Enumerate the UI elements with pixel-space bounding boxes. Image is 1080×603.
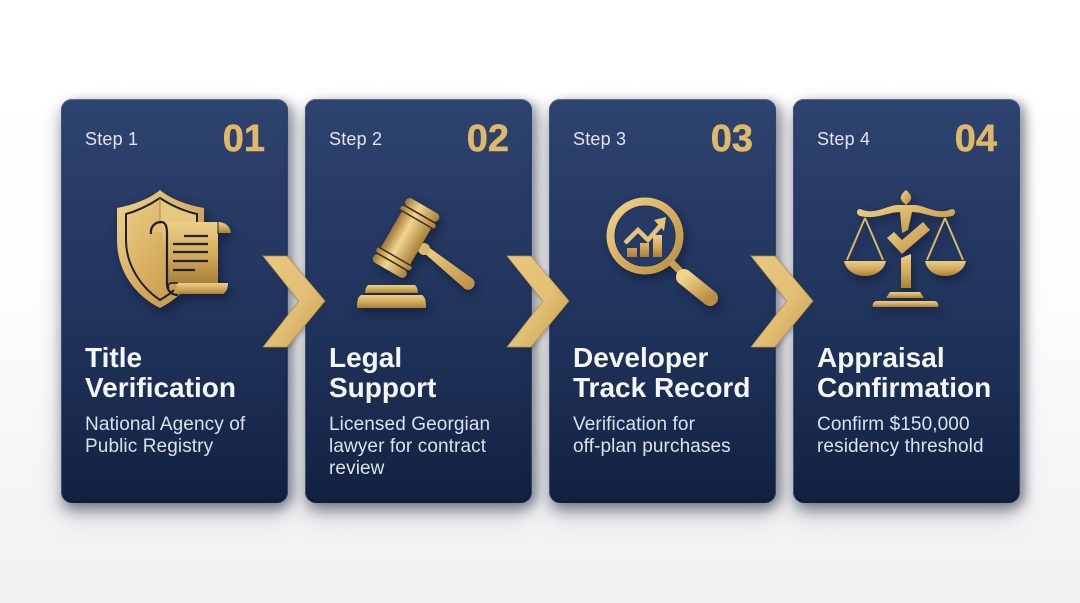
description: residency threshold	[817, 414, 984, 457]
description: registry: Public Registry	[85, 436, 213, 457]
step number 04: 04	[955, 118, 997, 160]
step label 4: Step 4	[817, 129, 870, 149]
arrow: step 1 to step 2	[262, 256, 326, 350]
description: lawyer: lawyer for contract	[329, 436, 486, 457]
heading: appraisal confirmation	[817, 342, 991, 403]
heading: legal support: Legal	[329, 342, 402, 373]
step label 2: Step 2	[329, 129, 382, 149]
heading: developer track record: Track Record	[573, 372, 750, 403]
description: residency threshold: residency threshold	[817, 436, 984, 457]
icon: shield and scroll	[116, 190, 234, 314]
description: registry: National Agency of	[85, 414, 245, 435]
description: off-plan	[573, 414, 731, 457]
step label 1: Step 1	[85, 129, 138, 149]
panel: step 2 legal support	[305, 99, 532, 503]
step number 03: 03	[711, 118, 753, 160]
description: lawyer: review	[329, 458, 385, 479]
heading: appraisal confirmation: Confirmation	[817, 372, 991, 403]
icon: gavel	[357, 198, 479, 316]
arrow: step 2 to step 3	[506, 256, 570, 350]
description: off-plan: off-plan purchases	[573, 436, 731, 457]
heading: developer track record	[573, 342, 750, 403]
step number 01: 01	[223, 118, 265, 160]
heading: developer track record: Developer	[573, 342, 708, 373]
description: off-plan: Verification for	[573, 414, 695, 435]
step number 02: 02	[467, 118, 509, 160]
heading: appraisal confirmation: Appraisal	[817, 342, 945, 373]
arrow: step 3 to step 4	[750, 256, 814, 350]
panel: step 1 title verification	[61, 99, 288, 503]
icon: scales with check mark	[844, 190, 970, 314]
description: registry	[85, 414, 246, 457]
heading: title verification: Title	[85, 342, 142, 373]
panel: step 4 appraisal confirmation	[793, 99, 1020, 503]
icon: magnifying glass with chart	[606, 198, 722, 312]
description: residency threshold: Confirm $150,000	[817, 414, 970, 435]
heading: title verification	[85, 342, 236, 403]
heading: legal support	[329, 342, 436, 403]
heading: title verification: Verification	[85, 372, 236, 403]
description: lawyer: Licensed Georgian	[329, 414, 490, 435]
heading: legal support: Support	[329, 372, 436, 403]
step label 3: Step 3	[573, 129, 626, 149]
description: lawyer	[329, 414, 490, 479]
panel: step 3 developer track record	[549, 99, 776, 503]
